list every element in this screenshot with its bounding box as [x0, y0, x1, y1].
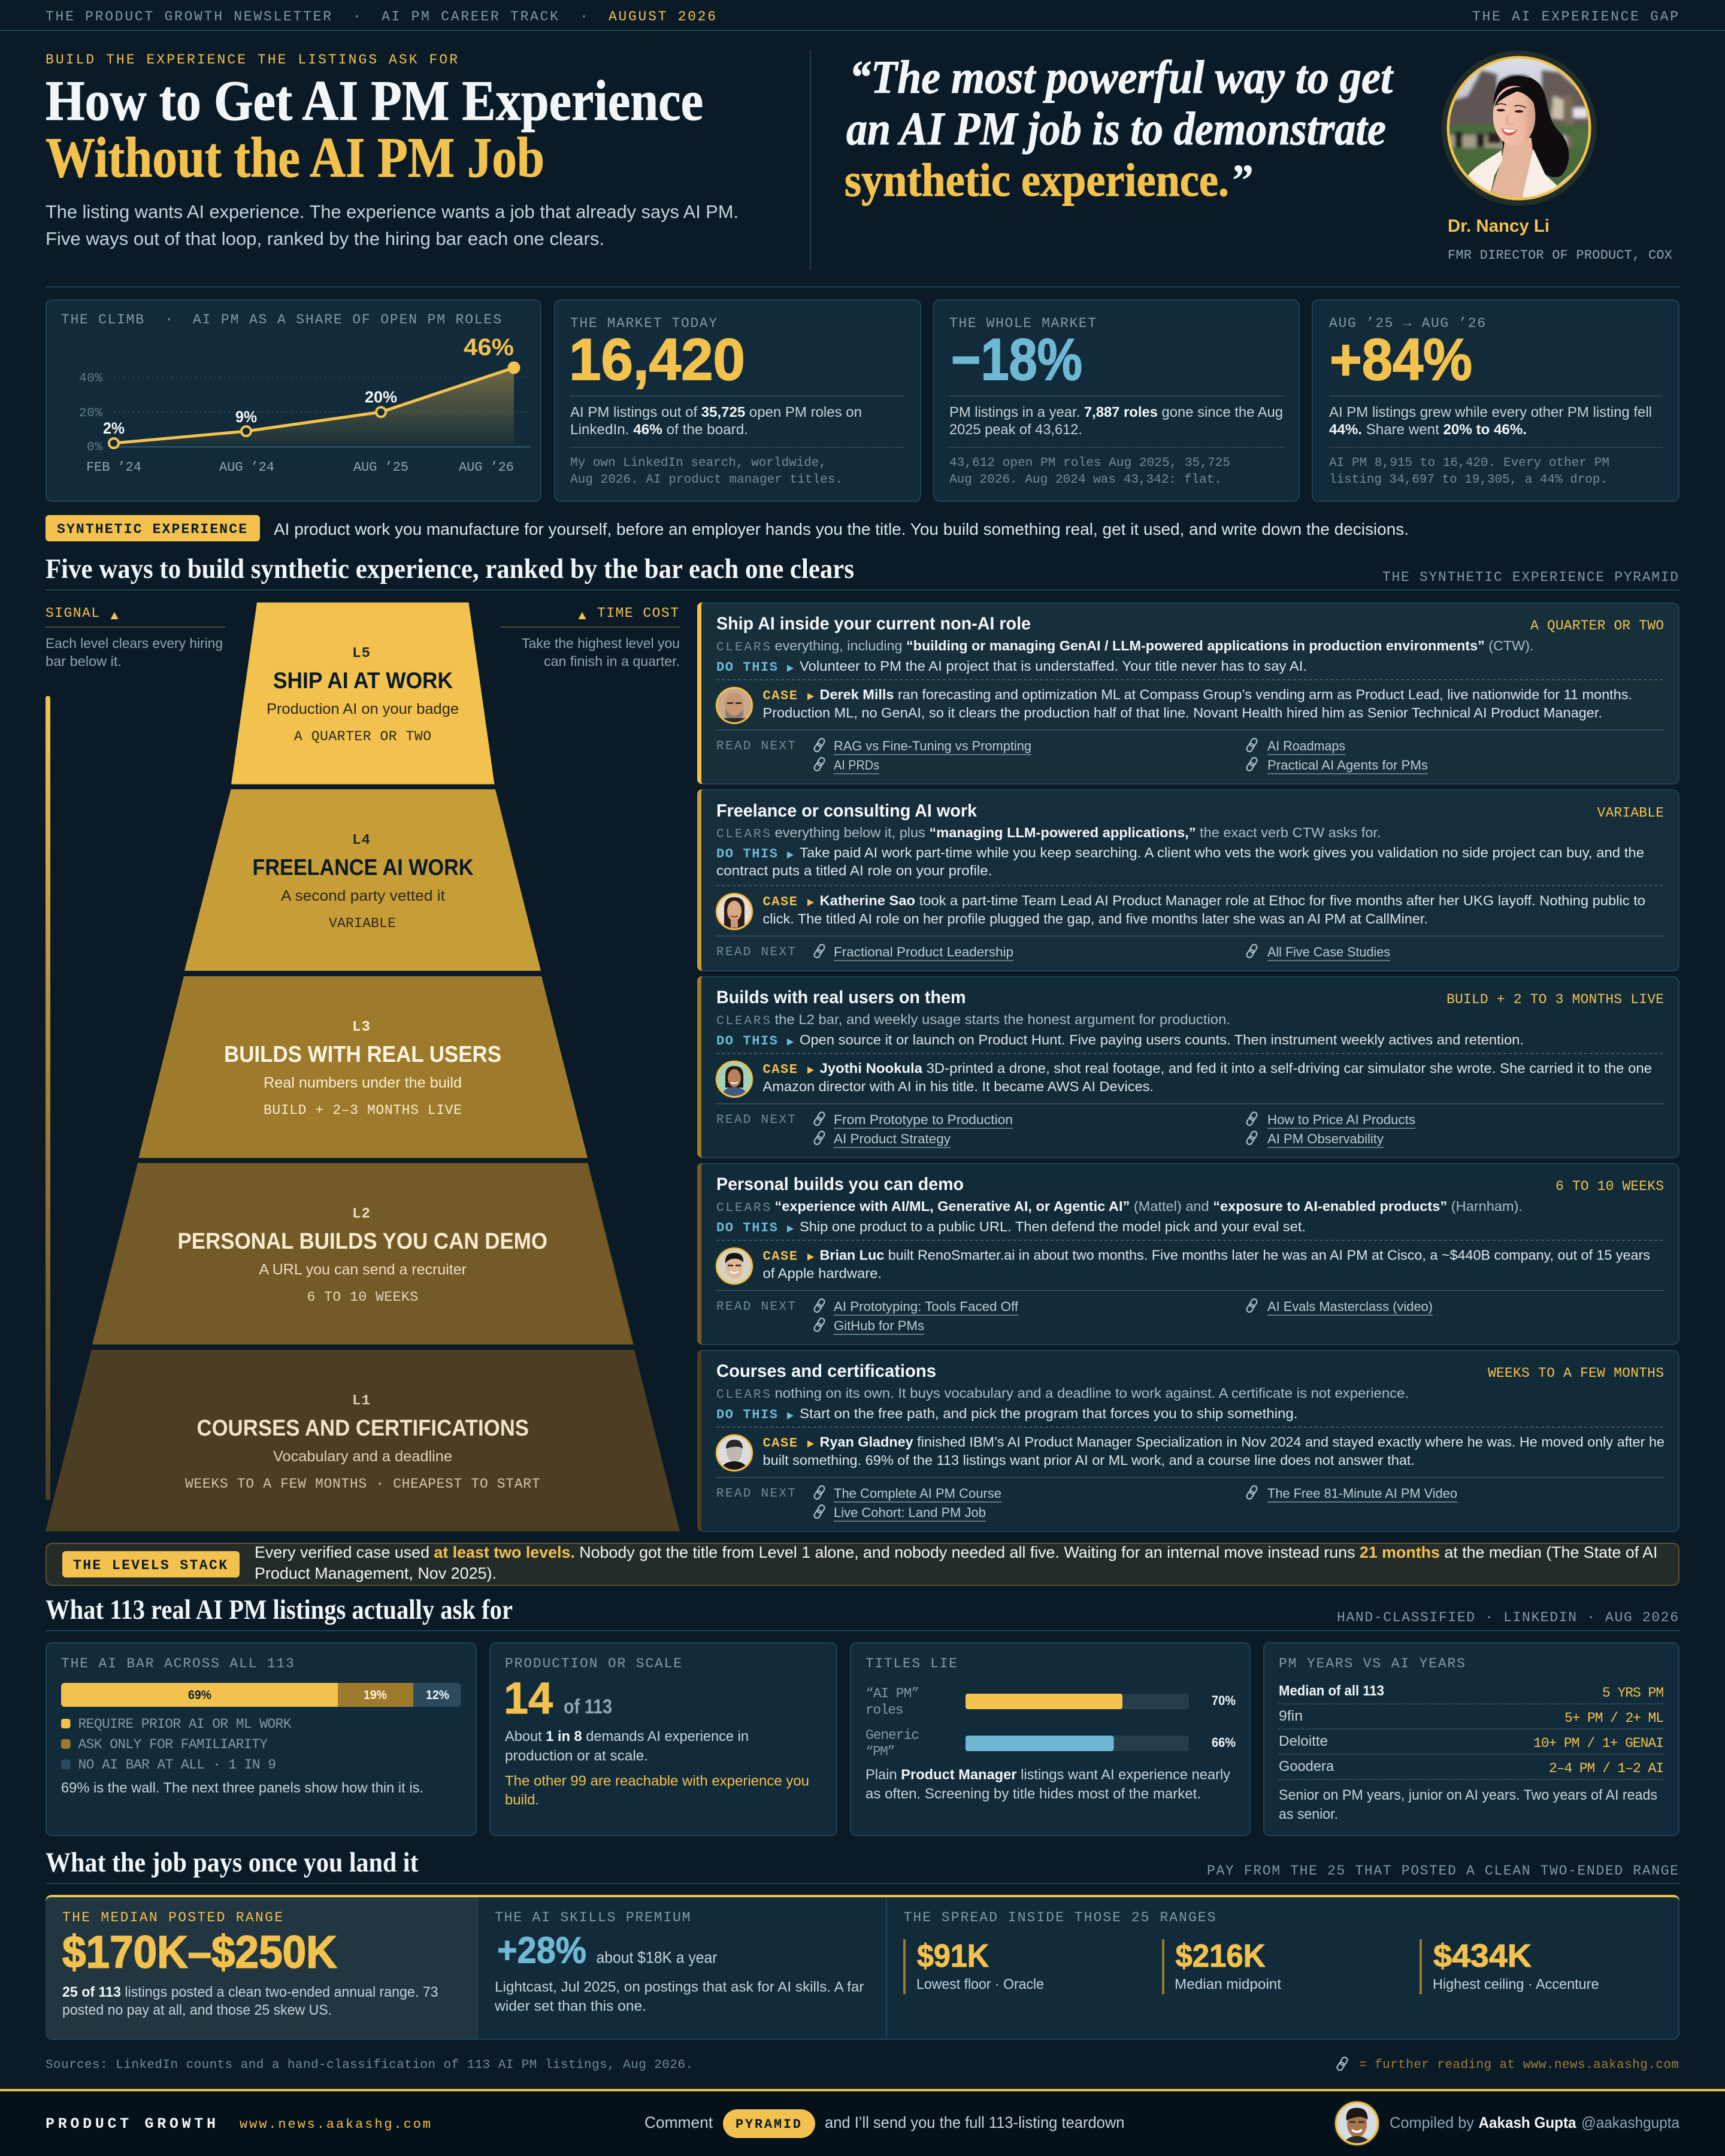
card: freelance or consulting: DO THIS — [716, 847, 777, 862]
level 4: VARIABLE — [329, 916, 396, 931]
line chart: 2% — [103, 419, 125, 437]
section heading: five ways — [46, 553, 1679, 591]
links: read next: How to Price AI Products — [1267, 1112, 1415, 1127]
card: personal builds: Ship one product to a public URL. Then defend the model pick and your eval set. — [800, 1219, 1306, 1234]
spread inside ranges: THE SPREAD INSIDE THOSE 25 RANGES — [903, 1910, 1216, 1925]
line chart: 9% — [235, 408, 257, 426]
footer: www.news.aakashg.com — [240, 2117, 431, 2132]
card: builds with real users: Open source it or launch on Product Hunt. Five paying users counts. Then instrument weekly actives and retention. — [800, 1032, 1524, 1047]
links: read next — [813, 1111, 1415, 1148]
card: freelance or consulting: CLEARS — [716, 828, 770, 841]
panel: PM years vs AI years — [1264, 1643, 1679, 1836]
signal gradient bar — [46, 696, 50, 1500]
level 5 — [231, 602, 495, 785]
links: read next: Live Cohort: Land PM Job — [834, 1505, 986, 1520]
panel: aug 25 to aug 26 — [1312, 300, 1679, 501]
panel: PM years vs AI years: PM YEARS VS AI YEARS — [1279, 1656, 1465, 1671]
links: read next: Fractional Product Leadership — [834, 944, 1013, 959]
panel: production or scale: build. — [505, 1792, 539, 1808]
table rows: 5+ PM / 2+ ML — [1564, 1710, 1664, 1726]
panel: the market today: AI PM listings out of 35,725 open PM roles on — [570, 404, 862, 420]
card: freelance or consulting: click. The titled AI role on her profile plugged the gap, and five months later she was an AI PM at CallMiner. — [763, 911, 1428, 926]
card: ship AI inside your current role: CLEARS — [716, 641, 770, 655]
card: freelance or consulting — [697, 789, 1679, 971]
level 2: PERSONAL BUILDS YOU CAN DEMO — [177, 1229, 547, 1254]
panel: PM years vs AI years: Senior on PM years, junior on AI years. Two years of AI reads — [1279, 1787, 1657, 1803]
panel: aug 25 to aug 26: AI PM listings grew while every other PM listing fell — [1329, 404, 1652, 420]
median range: 25 of 113 listings posted a clean two-ended annual range. 73 — [62, 1984, 438, 2000]
links: read next: GitHub for PMs — [834, 1318, 924, 1333]
card: personal builds — [697, 1163, 1679, 1345]
median midpoint: Median midpoint — [1175, 1976, 1281, 1993]
card: builds with real users: BUILD + 2 TO 3 MONTHS LIVE — [1446, 992, 1664, 1007]
callout: the levels stack — [46, 1543, 1679, 1585]
table rows: Median of all 113 — [1279, 1683, 1384, 1699]
panel: titles lie: Plain Product Manager listings want AI experience nearly — [865, 1767, 1230, 1783]
panel: the climb chart: AI PM AS A SHARE OF OPEN PM ROLES — [193, 312, 501, 328]
panel: the whole market: 43,612 open PM roles Aug 2025, 35,725 — [949, 456, 1230, 470]
level 1: COURSES AND CERTIFICATIONS — [196, 1416, 529, 1441]
lowest floor: $91K — [917, 1938, 989, 1974]
section heading: listings: What 113 real AI PM listings actually ask for — [46, 1594, 513, 1625]
bar: AI PM roles: roles — [865, 1702, 903, 1718]
card: builds with real users: Amazon director with AI in his title. It became AWS AI Devices. — [763, 1079, 1154, 1094]
panel: the market today: Aug 2026. AI product manager titles. — [570, 473, 843, 487]
level 2: A URL you can send a recruiter — [259, 1261, 467, 1278]
card: personal builds: DO THIS — [716, 1221, 777, 1236]
portrait: Dr. Nancy Li — [1441, 50, 1597, 206]
line chart: AUG ’24 — [219, 460, 274, 475]
panel: the whole market: −18% — [951, 326, 1082, 392]
level 3: L3 — [352, 1019, 370, 1035]
top bar: AUGUST 2026 — [609, 9, 716, 25]
lowest floor — [903, 1938, 1044, 1994]
links: read next: AI Product Strategy — [834, 1131, 951, 1146]
panel: production or scale: About 1 in 8 demands AI experience in — [505, 1728, 749, 1745]
panel: AI bar across all 113 — [46, 1643, 476, 1836]
panel: aug 25 to aug 26: +84% — [1330, 326, 1472, 392]
card: freelance or consulting: CASE — [763, 895, 797, 910]
panel: production or scale: The other 99 are reachable with experience you — [505, 1773, 809, 1789]
panel: the whole market: Aug 2026. Aug 2024 was 43,342: flat. — [949, 473, 1222, 487]
subtitle: Five ways out of that loop, ranked by the hiring bar each one clears. — [46, 228, 604, 249]
AI skills premium: THE AI SKILLS PREMIUM — [495, 1910, 690, 1925]
stacked bar — [61, 1683, 461, 1707]
card: courses and certifications — [697, 1350, 1679, 1531]
stacked bar: 19% — [364, 1688, 387, 1702]
time cost note: TIME COST — [597, 605, 679, 621]
footer: PRODUCT GROWTH — [46, 2115, 216, 2133]
top bar: THE AI EXPERIENCE GAP — [1472, 9, 1678, 25]
level 5: L5 — [352, 646, 370, 662]
avatar: Brian Luc — [715, 1246, 754, 1286]
stacked bar: 12% — [426, 1688, 449, 1702]
card: personal builds: READ NEXT — [716, 1300, 795, 1314]
links: read next — [813, 737, 1428, 774]
links: read next: The Free 81-Minute AI PM Video — [1267, 1486, 1457, 1501]
card: courses and certifications: CASE — [763, 1436, 797, 1451]
panel: production or scale: 14 — [504, 1673, 553, 1723]
top bar: AI PM CAREER TRACK — [382, 9, 558, 25]
bar: AI PM roles: 70% — [1212, 1693, 1236, 1708]
table rows: Goodera — [1279, 1758, 1334, 1775]
line chart: 46% — [464, 334, 514, 361]
signal note — [46, 605, 225, 669]
bar: generic PM: “PM” — [865, 1744, 895, 1760]
card: ship AI inside your current role: A QUARTER OR TWO — [1530, 618, 1664, 634]
panel: the climb chart — [46, 300, 541, 501]
section heading: pay — [46, 1847, 1679, 1884]
card: freelance or consulting: Freelance or consulting AI work — [716, 801, 977, 820]
panel: production or scale: production or at scale. — [505, 1748, 648, 1764]
line chart: 20% — [79, 407, 102, 420]
links: read next: RAG vs Fine-Tuning vs Prompting — [834, 738, 1031, 753]
eyebrow: BUILD THE EXPERIENCE THE LISTINGS ASK FOR — [46, 52, 458, 68]
panel: titles lie — [851, 1643, 1250, 1836]
links: read next: The Complete AI PM Course — [834, 1486, 1001, 1501]
level 5: A QUARTER OR TWO — [294, 729, 431, 744]
card: courses and certifications: nothing on its own. It buys vocabulary and a deadline to work against. A certificate is not experience. — [775, 1385, 1409, 1401]
speaker role: FMR DIRECTOR OF PRODUCT, COX — [1448, 248, 1672, 263]
links: read next — [813, 1485, 1457, 1522]
pull quote: an AI PM job is to demonstrate — [846, 102, 1386, 155]
section heading: five ways: Five ways to build synthetic experience, ranked by the bar each one clears — [46, 553, 854, 585]
panel: AI bar across all 113: THE AI BAR ACROSS ALL 113 — [61, 1656, 294, 1671]
panel: production or scale — [490, 1643, 837, 1836]
level 2 — [92, 1163, 634, 1345]
bar: generic PM: Generic — [865, 1727, 919, 1743]
median range: THE MEDIAN POSTED RANGE — [62, 1910, 283, 1925]
time cost note — [501, 605, 680, 669]
links: read next: Practical AI Agents for PMs — [1267, 758, 1428, 773]
AI skills premium: wider set than this one. — [494, 1998, 646, 2015]
bar: generic PM: 66% — [1212, 1735, 1236, 1750]
links: read next: All Five Case Studies — [1267, 944, 1390, 959]
card: ship AI inside your current role: READ NEXT — [716, 740, 795, 753]
links: read next: AI Roadmaps — [1267, 738, 1345, 753]
card: personal builds: CLEARS — [716, 1201, 770, 1215]
panel: pay — [46, 1895, 1679, 2039]
links: read next — [813, 1298, 1433, 1335]
panel: aug 25 to aug 26: 44%. Share went 20% to 46%. — [1329, 422, 1527, 438]
links: read next — [813, 943, 1390, 961]
pull quote: “The most powerful way to get — [849, 51, 1394, 103]
subtitle — [46, 201, 739, 249]
level 4: L4 — [352, 832, 370, 849]
panel: titles lie: TITLES LIE — [865, 1656, 957, 1671]
links: read next: AI Evals Masterclass (video) — [1267, 1299, 1433, 1314]
time cost note: can finish in a quarter. — [544, 653, 680, 669]
callout: the levels stack: Product Management, Nov 2025). — [255, 1564, 497, 1582]
AI skills premium: about $18K a year — [597, 1949, 718, 1967]
card: freelance or consulting: Take paid AI work part-time while you keep searching. A client who vets the work gives you validation no side project can buy, and the — [800, 845, 1644, 861]
pull quote — [845, 51, 1394, 206]
card: freelance or consulting: VARIABLE — [1597, 805, 1664, 820]
card: ship AI inside your current role — [697, 602, 1679, 784]
median range: $170K–$250K — [62, 1927, 337, 1978]
card: builds with real users: Jyothi Nookula 3D-printed a drone, shot real footage, and fed it into a self-driving car simulator she wrote. She carried it to the one — [819, 1060, 1652, 1076]
top bar — [0, 9, 1725, 31]
callout: the levels stack: THE LEVELS STACK — [73, 1558, 227, 1573]
section heading: listings — [46, 1594, 1679, 1631]
line chart — [79, 334, 531, 475]
median range — [62, 1910, 438, 2018]
level 4 — [184, 789, 541, 971]
card: courses and certifications: CLEARS — [716, 1388, 770, 1402]
panel: the whole market — [934, 300, 1299, 501]
card: builds with real users — [697, 976, 1679, 1158]
line chart: 20% — [365, 388, 397, 406]
level 5: SHIP AI AT WORK — [273, 668, 453, 694]
links: read next: From Prototype to Production — [834, 1112, 1013, 1127]
lowest floor: Lowest floor · Oracle — [916, 1976, 1044, 1993]
card: builds with real users: DO THIS — [716, 1034, 777, 1049]
avatar: Ryan Gladney — [715, 1433, 754, 1473]
card: ship AI inside your current role: Production ML, no GenAI, so it clears the production half of that line. Novant Health hired him as Senior Technical AI Product Manager. — [763, 705, 1602, 720]
time cost note: Take the highest level you — [522, 635, 680, 651]
footer: PYRAMID — [736, 2117, 801, 2132]
title: How to Get AI PM Experience — [46, 69, 703, 132]
speaker name: Dr. Nancy Li — [1448, 216, 1550, 236]
signal note: Each level clears every hiring — [46, 635, 223, 651]
median midpoint: $216K — [1175, 1938, 1265, 1974]
title: Without the AI PM Job — [46, 126, 544, 189]
level 1: L1 — [352, 1393, 370, 1409]
line chart: AUG ’26 — [459, 460, 514, 475]
card: personal builds: CASE — [763, 1249, 797, 1264]
card: ship AI inside your current role: DO THIS — [716, 660, 777, 675]
pyramid — [46, 602, 680, 1531]
top bar: · — [353, 9, 361, 25]
level 5: Production AI on your badge — [267, 701, 459, 717]
card: courses and certifications: Start on the free path, and pick the program that forces you to ship something. — [800, 1406, 1297, 1421]
card: courses and certifications: WEEKS TO A FEW MONTHS — [1488, 1365, 1664, 1381]
section heading: five ways: THE SYNTHETIC EXPERIENCE PYRAMID — [1382, 570, 1678, 585]
panel: aug 25 to aug 26: listing 34,697 to 19,305, a 44% drop. — [1329, 473, 1608, 487]
further reading key: = further reading at www.news.aakashg.com — [1359, 2058, 1679, 2072]
card: builds with real users: Builds with real users on them — [716, 988, 966, 1007]
bar: AI PM roles — [865, 1686, 1236, 1718]
panel: the whole market: PM listings in a year. 7,887 roles gone since the Aug — [949, 404, 1283, 420]
panel: the market today: 16,420 — [569, 326, 745, 392]
level 3: BUILDS WITH REAL USERS — [224, 1042, 501, 1067]
level 2: 6 TO 10 WEEKS — [307, 1289, 418, 1305]
avatar: Katherine Sao — [715, 892, 754, 931]
section heading: pay: PAY FROM THE 25 THAT POSTED A CLEAN TWO-ENDED RANGE — [1207, 1863, 1678, 1879]
footer: Compiled by — [1390, 2113, 1474, 2131]
panel: the market today: My own LinkedIn search, worldwide, — [570, 456, 827, 470]
panel: aug 25 to aug 26: AI PM 8,915 to 16,420. Every other PM — [1329, 456, 1609, 470]
table rows: 5 YRS PM — [1602, 1685, 1664, 1701]
highest ceiling: Highest ceiling · Accenture — [1433, 1976, 1599, 1993]
legend: ASK ONLY FOR FAMILIARITY — [78, 1737, 268, 1752]
AI skills premium: Lightcast, Jul 2025, on postings that ask for AI skills. A far — [495, 1979, 864, 1995]
level 3 — [139, 976, 588, 1158]
panel: the climb chart: THE CLIMB — [61, 312, 144, 328]
panel: the market today: THE MARKET TODAY — [570, 316, 717, 331]
callout: the levels stack: Every verified case used at least two levels. Nobody got the title from Level 1 alone, and nobody needed all five. Waiting for an internal move instead runs 21 months at the median (The State of AI — [255, 1543, 1658, 1561]
panel: AI bar across all 113: 69% is the wall. The next three panels show how thin it is. — [61, 1780, 423, 1796]
line chart: 0% — [87, 441, 102, 455]
panel: the market today: LinkedIn. 46% of the board. — [570, 422, 748, 438]
links: read next: AI PRDs — [834, 758, 879, 773]
top bar: · — [580, 9, 588, 25]
table rows: 2–4 PM / 1–2 AI — [1549, 1761, 1664, 1776]
level 3: Real numbers under the build — [264, 1074, 462, 1091]
sources: Sources: LinkedIn counts and a hand-classification of 113 AI PM listings, Aug 2026. — [46, 2058, 693, 2072]
section heading: listings: HAND-CLASSIFIED · LINKEDIN · AUG 2026 — [1337, 1610, 1678, 1625]
panel: aug 25 to aug 26: AUG ’25 → AUG ’26 — [1329, 316, 1485, 331]
title — [46, 69, 703, 189]
pull quote: ” — [1230, 156, 1252, 206]
subtitle: The listing wants AI experience. The experience wants a job that already says AI PM. — [46, 201, 739, 222]
definition strip — [46, 515, 1409, 541]
card: personal builds: “experience with AI/ML, Generative AI, or Agentic AI” (Mattel) and “exposure to AI-enabled products” (Harnham). — [775, 1198, 1523, 1214]
footer: and I’ll send you the full 113-listing teardown — [825, 2113, 1125, 2131]
level 1: WEEKS TO A FEW MONTHS · CHEAPEST TO START — [185, 1476, 540, 1492]
highest ceiling — [1420, 1938, 1599, 1994]
level 4: A second party vetted it — [281, 888, 445, 904]
signal note: SIGNAL — [46, 605, 99, 621]
line chart: FEB ’24 — [86, 460, 141, 475]
table rows: Deloitte — [1279, 1733, 1328, 1749]
line chart: AUG ’25 — [353, 460, 408, 475]
panel: the whole market: 2025 peak of 43,612. — [949, 422, 1082, 438]
level 1 — [46, 1350, 680, 1531]
panel: the market today — [555, 300, 921, 501]
level 1: Vocabulary and a deadline — [273, 1448, 452, 1465]
card: ship AI inside your current role: Ship AI inside your current non-AI role — [716, 614, 1031, 634]
card: personal builds: Brian Luc built RenoSmarter.ai in about two months. Five months later he was an AI PM at Cisco, a ~$440B company, out of 15 years — [819, 1247, 1650, 1262]
level 3: BUILD + 2–3 MONTHS LIVE — [264, 1103, 462, 1118]
line chart: 40% — [79, 372, 102, 386]
card: personal builds: of Apple hardware. — [763, 1265, 882, 1281]
section heading: pay: What the job pays once you land it — [46, 1847, 419, 1878]
card: builds with real users: READ NEXT — [716, 1113, 795, 1127]
card: ship AI inside your current role: Volunteer to PM the AI project that is understaffed. Your title never has to say AI. — [800, 658, 1307, 674]
AI skills premium: +28% — [497, 1930, 586, 1972]
highest ceiling: $434K — [1433, 1938, 1532, 1974]
level 2: L2 — [352, 1206, 370, 1222]
panel: the climb chart: · — [165, 312, 173, 328]
card: courses and certifications: Ryan Gladney finished IBM’s AI Product Manager Specialization in Nov 2024 and stayed exactly where he was. He moved only after he — [819, 1434, 1665, 1449]
level 4: FREELANCE AI WORK — [253, 855, 474, 880]
footer: @aakashgupta — [1581, 2113, 1680, 2131]
legend: NO AI BAR AT ALL · 1 IN 9 — [78, 1757, 276, 1773]
card: courses and certifications: Courses and certifications — [716, 1361, 936, 1381]
card: builds with real users: the L2 bar, and weekly usage starts the honest argument for production. — [775, 1012, 1230, 1027]
panel: production or scale: of 113 — [564, 1695, 612, 1718]
card: builds with real users: CASE — [763, 1062, 797, 1077]
card: courses and certifications: built something. 69% of the 113 listings want prior AI or ML work, and a course line does not answer that. — [763, 1452, 1415, 1468]
card: personal builds: 6 TO 10 WEEKS — [1555, 1179, 1664, 1194]
card: freelance or consulting: READ NEXT — [716, 946, 795, 959]
panel: PM years vs AI years: as senior. — [1279, 1806, 1338, 1822]
bar: generic PM — [865, 1727, 1236, 1760]
avatar: Jyothi Nookula — [715, 1059, 754, 1099]
card: courses and certifications: READ NEXT — [716, 1487, 795, 1501]
panel: production or scale: PRODUCTION OR SCALE — [505, 1656, 682, 1671]
card: builds with real users: CLEARS — [716, 1015, 770, 1028]
card: ship AI inside your current role: CASE — [763, 689, 797, 703]
legend: REQUIRE PRIOR AI OR ML WORK — [78, 1716, 292, 1732]
links: read next: AI Prototyping: Tools Faced Off — [834, 1299, 1019, 1314]
footer: Comment — [644, 2113, 713, 2131]
card: ship AI inside your current role: Derek Mills ran forecasting and optimization ML at Compass Group’s vending arm as Product Lead, live nationwide for 11 months. — [819, 686, 1632, 702]
card: courses and certifications: DO THIS — [716, 1407, 777, 1422]
pull quote: synthetic experience. — [845, 154, 1229, 206]
table rows — [1279, 1683, 1664, 1779]
card: ship AI inside your current role: everything, including “building or managing GenAI / LLM-powered applications in production environments” (CTW). — [775, 638, 1533, 653]
AI skills premium — [494, 1910, 864, 2015]
card: personal builds: Personal builds you can demo — [716, 1174, 964, 1194]
spread inside ranges — [903, 1910, 1599, 1994]
table rows: 10+ PM / 1+ GENAI — [1533, 1736, 1664, 1751]
footer — [0, 2089, 1725, 2156]
stacked bar: 69% — [188, 1688, 211, 1702]
legend — [61, 1716, 292, 1773]
card: freelance or consulting: Katherine Sao took a part-time Team Lead AI Product Manager role at Ethoc for five months after her UKG layoff. Nothing public to — [819, 893, 1645, 909]
definition strip: AI product work you manufacture for yourself, before an employer hands you the title. You build something real, get it used, and write down the decisions. — [274, 520, 1409, 538]
panel: the whole market: THE WHOLE MARKET — [949, 316, 1096, 331]
definition strip: SYNTHETIC EXPERIENCE — [57, 522, 247, 537]
footer: Aakash Gupta — [1478, 2113, 1576, 2131]
top bar: THE PRODUCT GROWTH NEWSLETTER — [46, 9, 331, 25]
avatar: Derek Mills — [715, 686, 754, 725]
card: freelance or consulting: everything below it, plus “managing LLM-powered applications,” the exact verb CTW asks for. — [775, 825, 1381, 840]
median range: posted no pay at all, and those 25 skew US. — [62, 2002, 332, 2018]
links: read next: AI PM Observability — [1267, 1131, 1384, 1146]
table rows: 9fin — [1279, 1708, 1303, 1724]
card: freelance or consulting: contract puts a titled AI role on your profile. — [716, 862, 992, 878]
median midpoint — [1162, 1938, 1281, 1994]
panel: titles lie: as often. Screening by title hides most of the market. — [865, 1786, 1201, 1802]
avatar: Aakash Gupta — [1334, 2100, 1380, 2146]
signal note: bar below it. — [46, 653, 122, 669]
bar: AI PM roles: “AI PM” — [865, 1686, 919, 1701]
